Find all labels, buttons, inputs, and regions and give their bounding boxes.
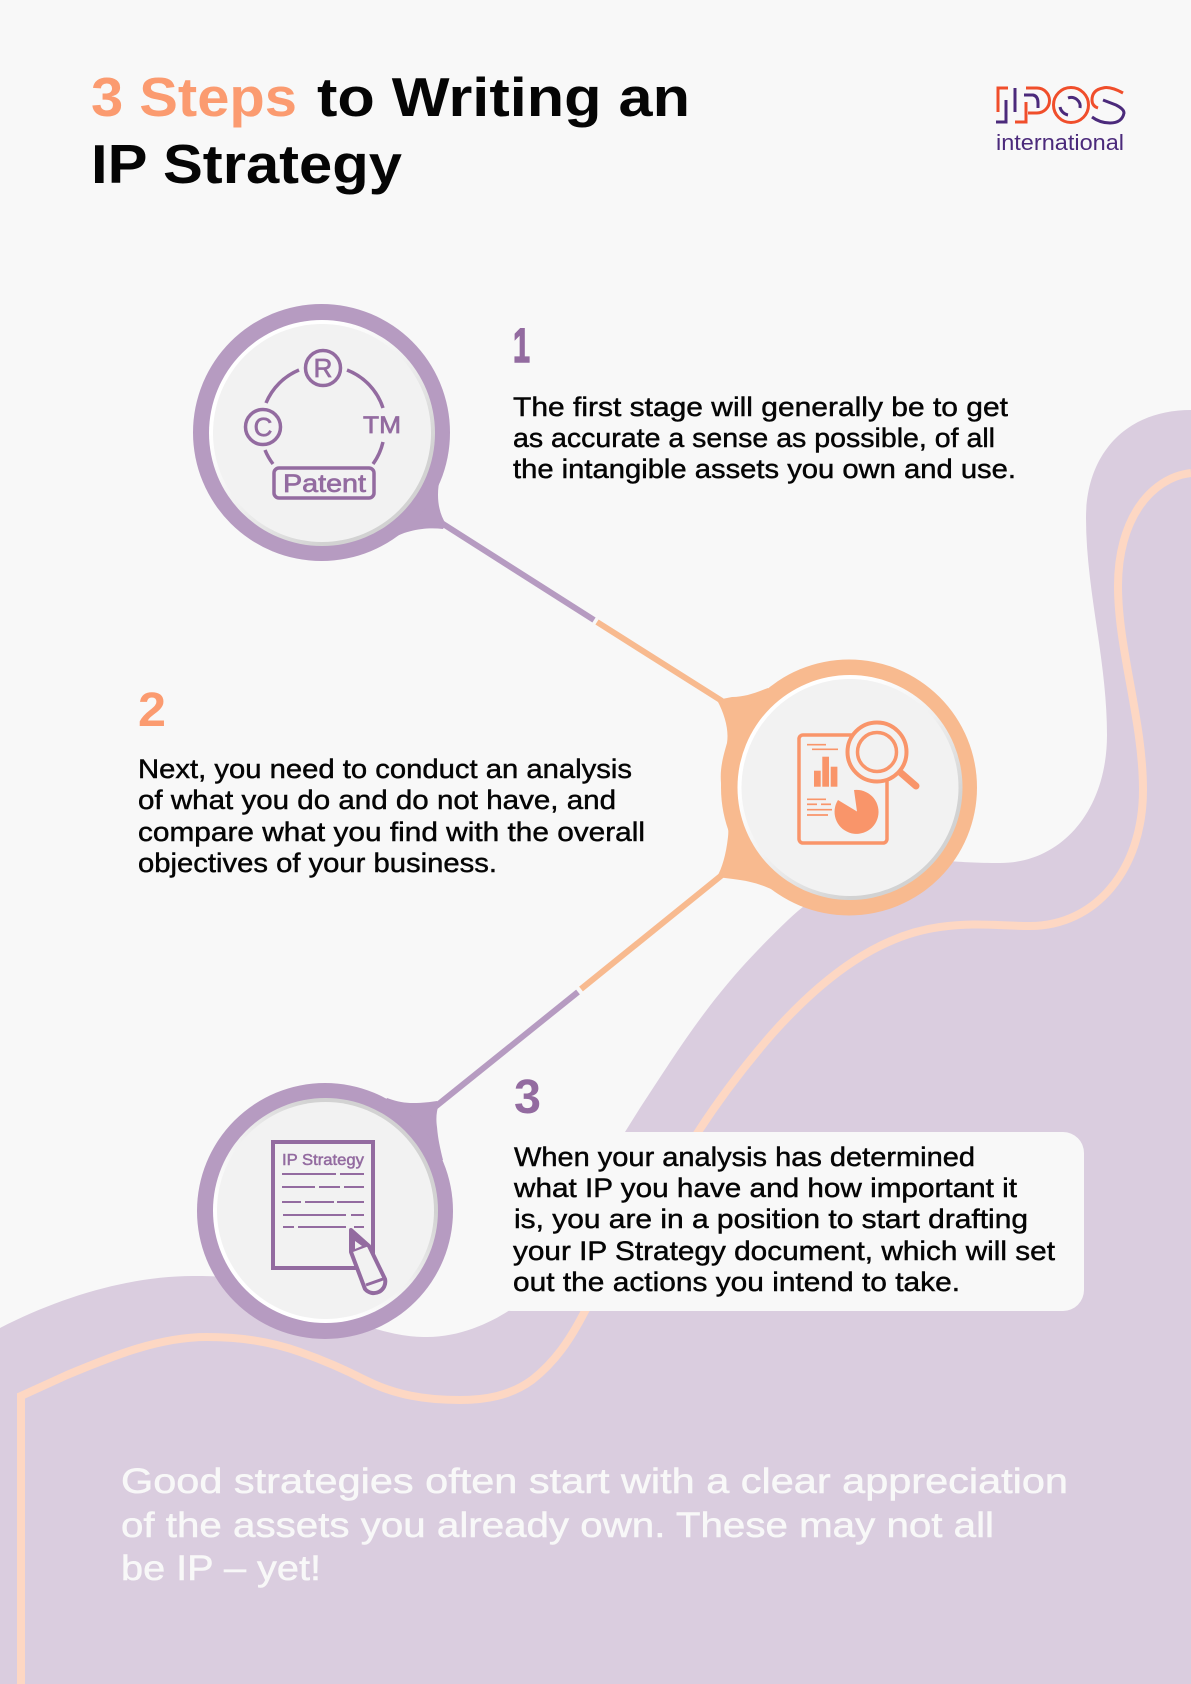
icon: IP symbols xyxy=(246,350,401,498)
step 1 text xyxy=(513,320,1016,484)
step 3 text xyxy=(513,1071,1056,1297)
text card for step 3 xyxy=(490,1132,1084,1311)
title: IP Strategy xyxy=(91,133,402,195)
icon: strategy document and pencil: IP Strategy xyxy=(282,1152,364,1169)
step 3 text: 3 xyxy=(514,1071,541,1124)
step 2 text: compare what you find with the overall xyxy=(138,817,645,847)
step 3 text: your IP Strategy document, which will set xyxy=(513,1236,1056,1266)
step 2 badge xyxy=(717,660,977,916)
closing message: Good strategies often start with a clear appreciation xyxy=(121,1462,1068,1501)
step 1 text: The first stage will generally be to get xyxy=(513,392,1009,422)
title: 3 Steps xyxy=(91,66,297,128)
step 2 text: 2 xyxy=(138,684,166,737)
logo: IPOS international xyxy=(996,88,1124,155)
step 2 text: objectives of your business. xyxy=(138,848,497,878)
step 2 text: of what you do and do not have, and xyxy=(138,785,616,815)
peach flowing line xyxy=(21,473,1191,1684)
step 3 text: is, you are in a position to start drafting xyxy=(514,1204,1028,1234)
icon: report and magnifier xyxy=(799,722,916,843)
closing message: be IP – yet! xyxy=(121,1549,321,1588)
closing message xyxy=(121,1462,1068,1588)
background wave shape xyxy=(0,410,1191,1684)
step 3 text: When your analysis has determined xyxy=(514,1142,975,1172)
connector: step 1 to step 2 xyxy=(440,522,722,701)
icon: IP symbols: Patent xyxy=(283,470,366,498)
step 3 badge xyxy=(197,1083,453,1339)
title xyxy=(91,66,690,195)
connector: step 2 to step 3 xyxy=(435,875,722,1107)
icon: IP symbols: R xyxy=(314,353,332,383)
step 3 text: out the actions you intend to take. xyxy=(513,1267,960,1297)
step 2 text xyxy=(138,684,645,878)
icon: IP symbols: C xyxy=(254,412,272,442)
step 1 text: the intangible assets you own and use. xyxy=(513,454,1016,484)
logo: IPOS international: international xyxy=(996,130,1124,155)
step 2 text: Next, you need to conduct an analysis xyxy=(138,754,632,784)
title: to Writing an xyxy=(317,66,690,128)
icon: strategy document and pencil xyxy=(273,1142,385,1293)
step 1 badge xyxy=(193,304,450,561)
step 3 text: what IP you have and how important it xyxy=(513,1173,1018,1203)
step 1 text: 1 xyxy=(513,320,530,373)
closing message: of the assets you already own. These may not all xyxy=(121,1506,994,1545)
step 1 text: as accurate a sense as possible, of all xyxy=(513,423,995,453)
icon: IP symbols: TM xyxy=(363,412,401,439)
